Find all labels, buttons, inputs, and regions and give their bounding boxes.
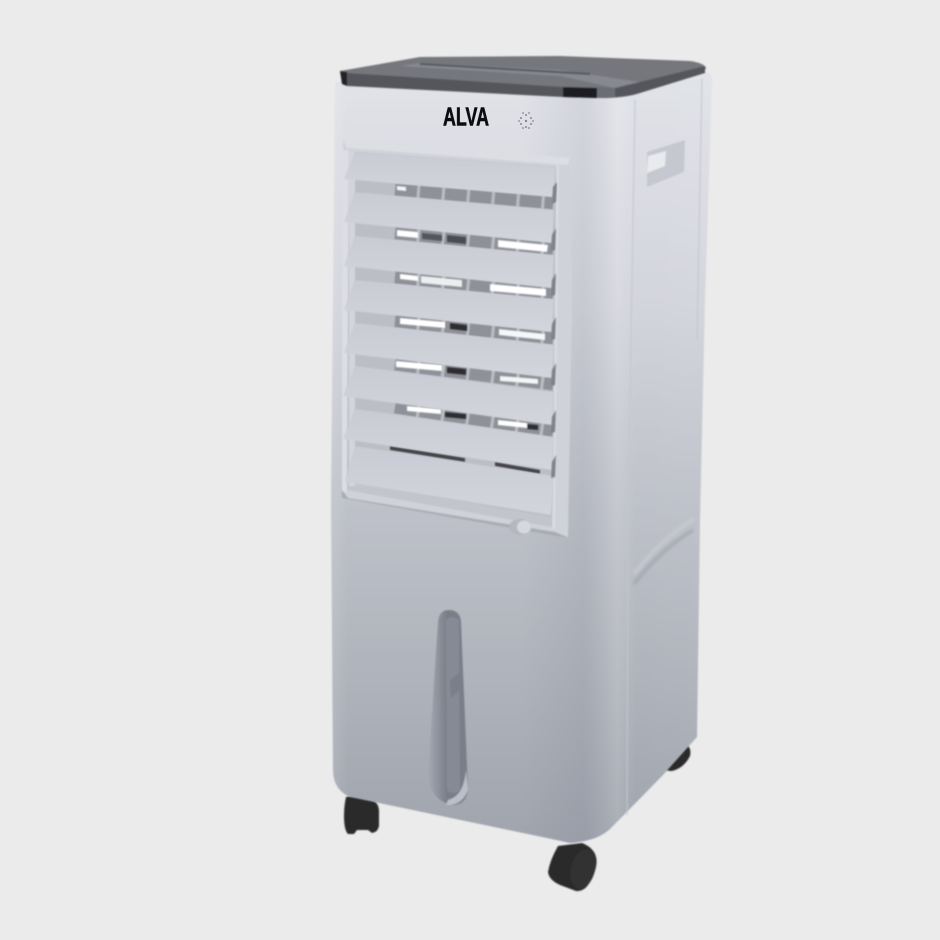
side panel seams xyxy=(627,78,702,815)
louver 3 xyxy=(344,236,554,288)
side carrying handle xyxy=(647,140,685,187)
louver 4 xyxy=(344,280,554,332)
side panel diagonal groove xyxy=(634,518,695,584)
vent opening behind louvers xyxy=(347,152,556,527)
dark top lid xyxy=(340,56,706,98)
ALVA logo: ALVA xyxy=(443,102,489,132)
rear right caster xyxy=(664,744,690,771)
vent highlights and dark fan gaps xyxy=(390,186,548,474)
front left caster xyxy=(344,796,379,834)
louver adjust knob xyxy=(509,519,531,535)
louver blades xyxy=(343,152,556,515)
louver 2 xyxy=(344,192,554,243)
vent grille slots xyxy=(395,190,553,431)
louver right-end notches xyxy=(551,182,557,478)
louver 7 xyxy=(343,409,554,470)
control sensor dots xyxy=(518,112,534,129)
louver 6 xyxy=(343,366,554,425)
water level gauge xyxy=(428,610,468,805)
front right caster xyxy=(548,843,599,891)
cooler body xyxy=(331,72,712,843)
louver frame xyxy=(342,140,572,538)
louver 5 xyxy=(344,323,554,378)
louver 1 xyxy=(344,152,556,197)
louver 8 xyxy=(345,446,554,515)
